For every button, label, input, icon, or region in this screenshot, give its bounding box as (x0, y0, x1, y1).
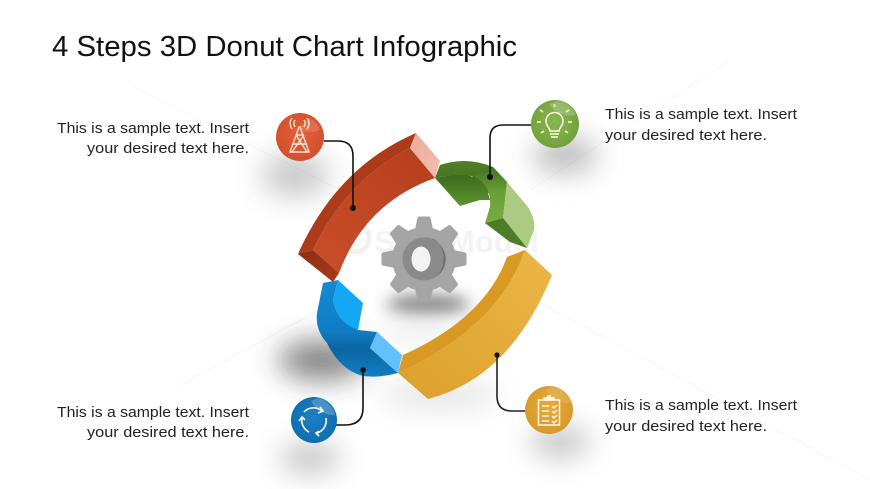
icon: cycle (blue) (291, 397, 337, 443)
segment: red (298, 133, 440, 282)
end face: dark red (298, 250, 339, 282)
text: bottom left: your desired text here. (87, 425, 249, 441)
lower face (485, 218, 527, 248)
top face: bright blue (333, 280, 363, 330)
connector dot: blue (360, 367, 366, 373)
faint background lines (130, 60, 870, 480)
connector dot: green (487, 174, 493, 180)
text: bottom left (57, 405, 249, 441)
segment: blue (317, 280, 402, 377)
connector: red (324, 141, 353, 208)
end face: light blue (370, 332, 402, 373)
text: bottom right: This is a sample text. Insert (605, 398, 797, 414)
text: top right: This is a sample text. Insert (605, 107, 797, 123)
connector: yellow (497, 355, 525, 411)
title: 4 Steps 3D Donut Chart Infographic (52, 31, 517, 63)
lower face (327, 343, 398, 377)
connector: blue (336, 370, 363, 425)
text: top left: This is a sample text. Insert (57, 121, 249, 137)
text: top left: your desired text here. (87, 141, 249, 157)
arm face (474, 167, 507, 223)
segment: green (435, 161, 534, 248)
text: bottom left: This is a sample text. Insert (57, 405, 249, 421)
icon: tower (red) (276, 113, 324, 161)
connector dot: yellow (494, 352, 500, 358)
text: bottom right (605, 398, 797, 435)
shadows (261, 137, 597, 473)
segment: yellow (398, 250, 552, 399)
connector: green (490, 125, 531, 176)
text: top right: your desired text here. (605, 128, 767, 144)
watermark: SlideModel (374, 224, 539, 259)
connector dot: red (350, 205, 356, 211)
icon: light bulb (green) (531, 100, 579, 148)
band (317, 280, 377, 348)
side face: light green (503, 182, 534, 248)
text: top right (605, 107, 797, 144)
text: top left (57, 121, 249, 157)
icon: clipboard (yellow) (525, 386, 573, 434)
gear icon (383, 218, 465, 300)
end face: pink (410, 133, 440, 178)
inner face (435, 175, 490, 206)
top band (435, 161, 507, 200)
text: bottom right: your desired text here. (605, 419, 767, 435)
